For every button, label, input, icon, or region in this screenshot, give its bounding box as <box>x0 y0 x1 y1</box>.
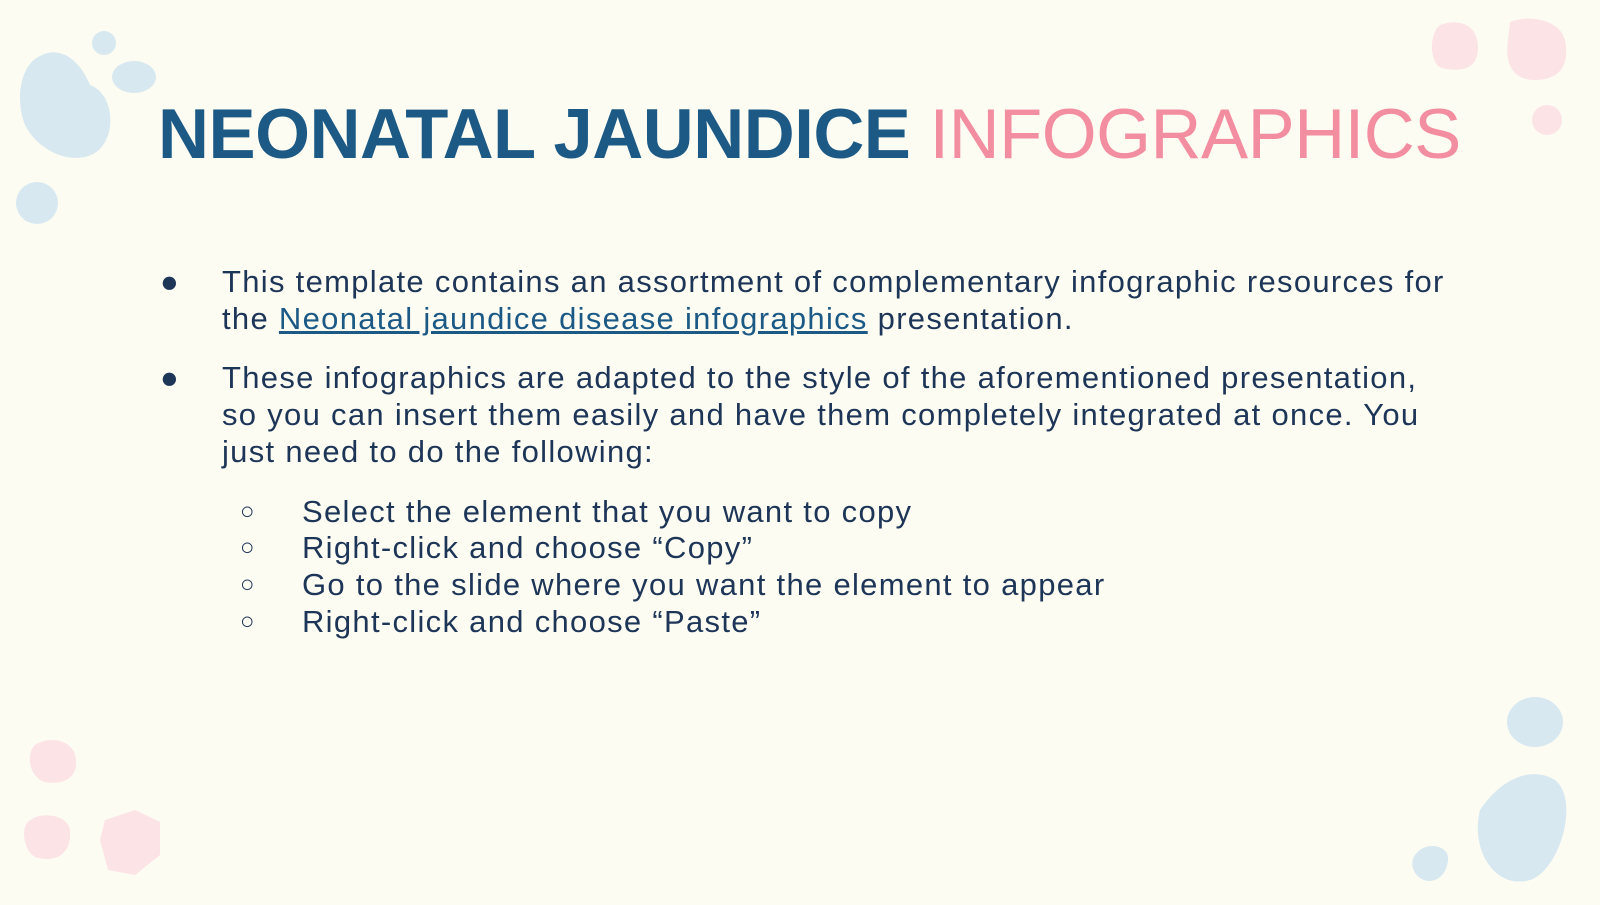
decorative blobs top-left <box>16 31 156 224</box>
bullet 2 <box>160 360 1419 469</box>
bullet 2: ● <box>160 360 179 395</box>
sub-steps: ○ <box>240 571 254 598</box>
bullet 1 <box>160 264 1445 336</box>
sub-steps <box>240 494 1105 639</box>
sub-steps: ○ <box>240 534 254 561</box>
bullet 1: ● <box>160 264 179 299</box>
sub-steps: Right-click and choose “Copy” <box>302 530 753 565</box>
sub-steps: Go to the slide where you want the element to appear <box>302 567 1105 602</box>
sub-steps: Select the element that you want to copy <box>302 494 912 529</box>
bullet 2: so you can insert them easily and have them completely integrated at once. You <box>222 397 1419 432</box>
decorative blobs bottom-left <box>24 740 160 875</box>
decorative blobs bottom-right <box>1412 697 1566 882</box>
sub-steps: Right-click and choose “Paste” <box>302 604 761 639</box>
bullet 1: This template contains an assortment of complementary infographic resources for <box>222 264 1445 299</box>
title: NEONATAL JAUNDICE INFOGRAPHICS <box>158 94 1461 173</box>
bullet 1: the Neonatal jaundice disease infographics presentation. <box>222 301 1074 336</box>
body text <box>160 264 1445 639</box>
decorative blobs top-right <box>1432 18 1566 135</box>
bullet 2: just need to do the following: <box>222 434 654 469</box>
bullet 2: These infographics are adapted to the style of the aforementioned presentation, <box>222 360 1417 395</box>
sub-steps: ○ <box>240 608 254 635</box>
sub-steps: ○ <box>240 498 254 525</box>
